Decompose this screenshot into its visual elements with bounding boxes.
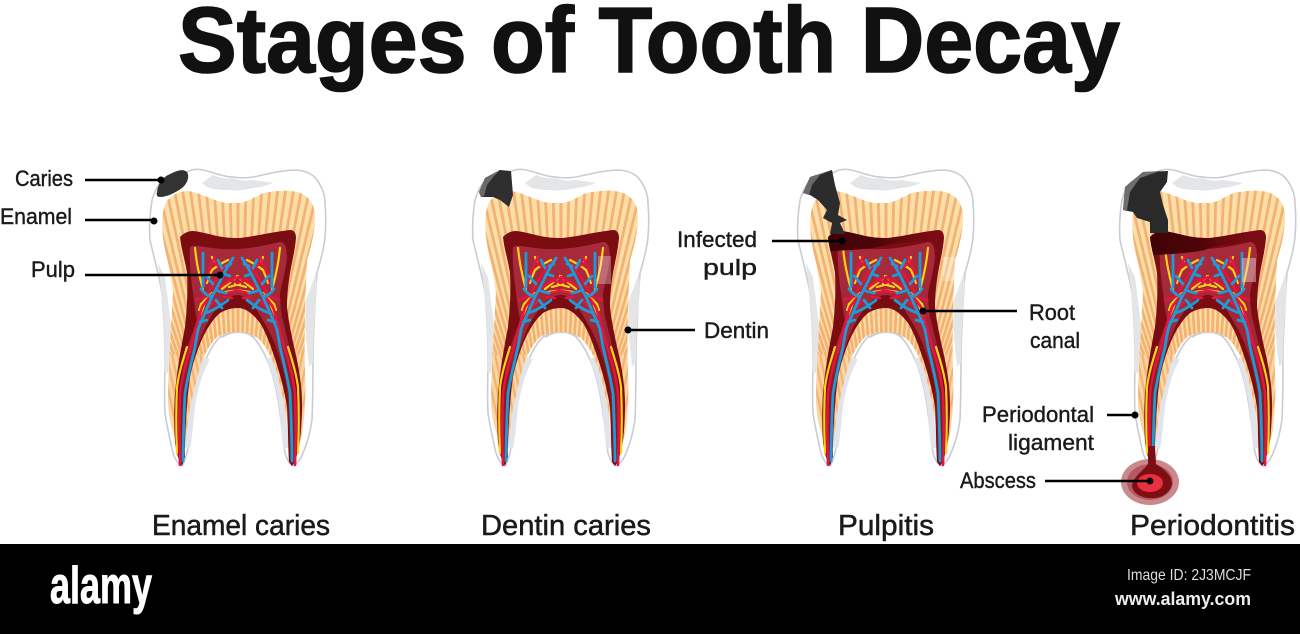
label: root canal: canal (1030, 328, 1080, 353)
deep cavity (1123, 171, 1168, 233)
stage name: pulpitis: Pulpitis (838, 510, 934, 542)
panel: enamel caries (0, 166, 330, 542)
label: dentin: Dentin (704, 318, 769, 343)
tooth: dentin caries (473, 169, 649, 466)
label: infected pulp: Infected (677, 227, 757, 252)
label: pulp: Pulp (31, 257, 75, 282)
tooth: enamel caries (150, 169, 326, 466)
label: infected pulp: pulp (703, 255, 757, 280)
abscess (1121, 446, 1179, 505)
label: periodontal ligament: ligament (1008, 430, 1094, 455)
label: root canal: Root (1029, 300, 1075, 325)
label: periodontal ligament: Periodontal (982, 402, 1094, 427)
label: enamel: Enamel (0, 204, 72, 229)
label: dentin (624, 318, 769, 343)
stage name: periodontitis: Periodontitis (1130, 510, 1295, 542)
caries spot (157, 170, 188, 197)
tooth: periodontitis (1120, 169, 1296, 466)
label: caries (15, 166, 164, 191)
image id: Image ID: 2J3MCJF (1127, 567, 1251, 584)
label: periodontal ligament (982, 402, 1138, 455)
label: infected pulp (677, 227, 846, 280)
stage name: enamel caries: Enamel caries (152, 510, 330, 542)
label: pulp (31, 257, 224, 282)
alamy logo: alamy (50, 557, 152, 615)
tooth: pulpitis (798, 169, 974, 466)
watermark patch (943, 257, 957, 281)
infected zone (1150, 230, 1255, 256)
footer bar (0, 544, 1300, 634)
dentin cavity (479, 170, 513, 207)
stage name: dentin caries: Dentin caries (481, 510, 651, 542)
label: caries: Caries (15, 166, 73, 191)
infected zone (828, 230, 933, 252)
watermark patch (1242, 258, 1256, 282)
website: www.alamy.com (1114, 589, 1251, 609)
watermark patch (598, 256, 611, 284)
deep cavity (803, 170, 847, 234)
panel: pulpitis (677, 169, 1080, 542)
label: enamel (0, 204, 158, 229)
panel: dentin caries (473, 169, 769, 542)
panel: periodontitis (960, 169, 1296, 542)
label: root canal (920, 300, 1080, 353)
label: abscess: Abscess (960, 468, 1036, 493)
